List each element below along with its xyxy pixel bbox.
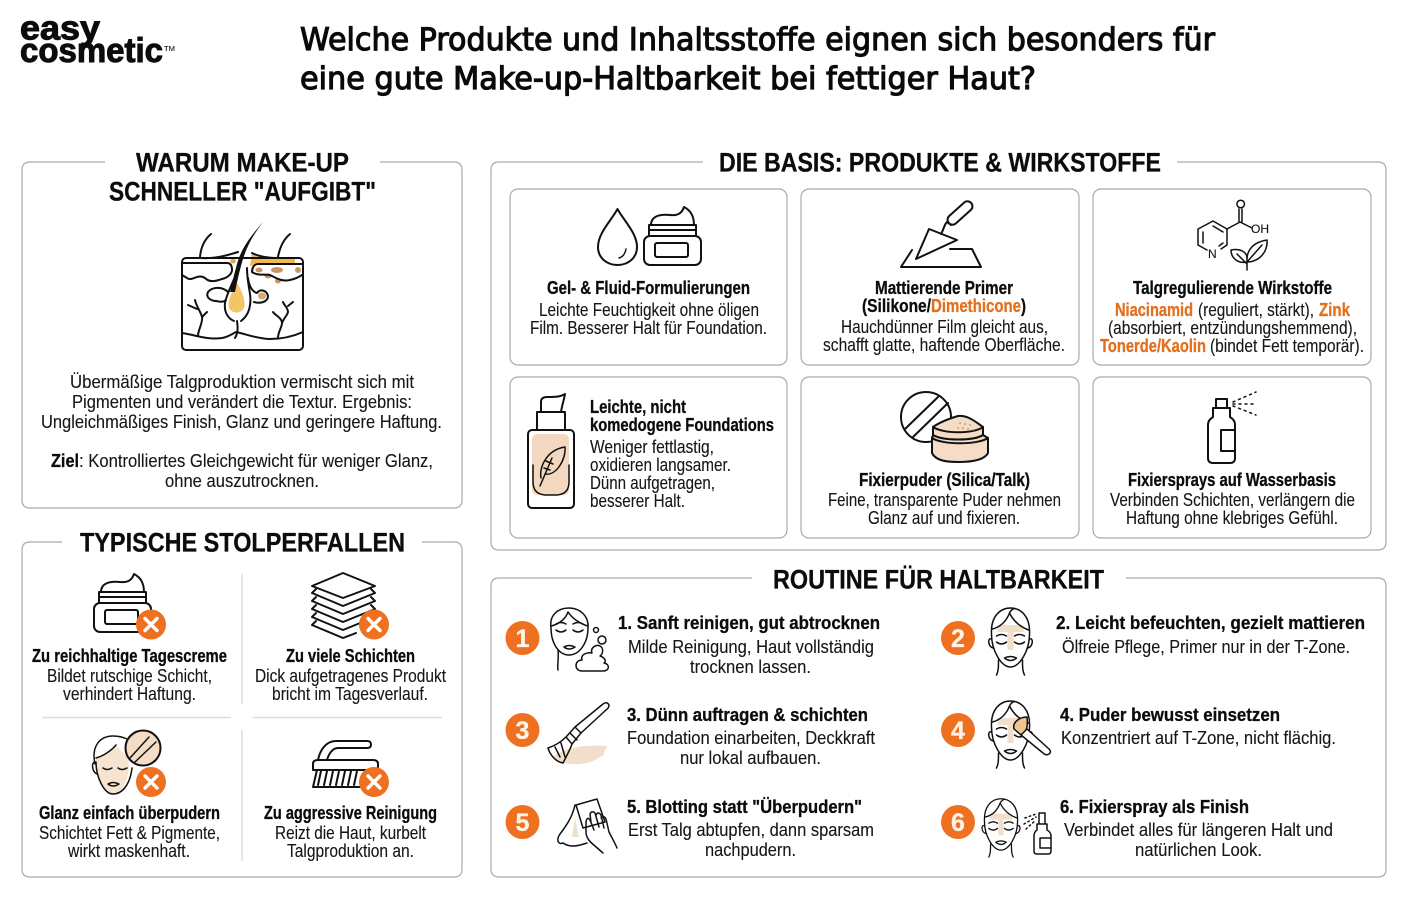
- panel: warum make-up schneller aufgibt: [22, 148, 462, 508]
- card: gel and fluid formulations: Leichte Feuchtigkeit ohne öligen: [539, 300, 759, 320]
- step 6: natürlichen Look.: [1135, 840, 1262, 860]
- badge: 5: [506, 805, 540, 839]
- card: mattifying primer: Mattierende Primer: [875, 278, 1013, 298]
- card: setting powder: Fixierpuder (Silica/Talk): [859, 470, 1030, 490]
- pitfall: powdering over shine: wirkt maskenhaft.: [67, 841, 190, 861]
- icon: blotting paper on nose: [558, 799, 617, 853]
- heading: warum make-up: [109, 148, 376, 206]
- icon: puff and powder jar: [901, 392, 988, 462]
- text block: goal: ohne auszutrocknen.: [165, 471, 319, 491]
- icon: layer stack with cross: [312, 573, 389, 640]
- text block: explanation: Übermäßige Talgproduktion vermischt sich mit: [70, 372, 414, 392]
- step 3: 3. Dünn auftragen & schichten: [627, 705, 868, 725]
- step 1: trocknen lassen.: [690, 657, 811, 677]
- step 5: Erst Talg abtupfen, dann sparsam: [628, 820, 874, 840]
- icon: spray bottle: [1208, 392, 1257, 463]
- step 6: 6. Fixierspray als Finish: [1060, 797, 1249, 817]
- pitfall: too many layers: bricht im Tagesverlauf.: [272, 684, 428, 704]
- heading: routine: ROUTINE FÜR HALTBARKEIT: [773, 564, 1104, 594]
- card: setting sprays: Fixiersprays auf Wasserbasis: [1128, 470, 1336, 490]
- step 2: 2. Leicht befeuchten, gezielt mattieren: [1056, 613, 1365, 633]
- logo: [20, 10, 175, 70]
- icon: face with powder brush: [989, 701, 1050, 768]
- step 4: 4. Puder bewusst einsetzen: [1060, 705, 1280, 725]
- card: sebum regulating actives: Tonerde/Kaolin: [1100, 336, 1206, 356]
- panel: routine: [491, 564, 1386, 877]
- title: [300, 22, 1215, 97]
- icon: niacinamide molecule and leaves: [1198, 200, 1269, 270]
- card: light non-comedogenic foundations: oxidieren langsamer.: [590, 455, 731, 475]
- badge: 3: 3: [516, 717, 529, 745]
- pitfall: rich day cream: Bildet rutschige Schicht,: [47, 666, 212, 686]
- step 4: [941, 701, 1336, 768]
- logo: TM: [164, 46, 175, 53]
- pitfall: rich day cream: [32, 574, 227, 704]
- card: setting sprays: [1093, 377, 1371, 538]
- text block: explanation: Ungleichmäßiges Finish, Glanz und geringere Haftung.: [41, 412, 442, 432]
- badge: 1: [506, 621, 540, 655]
- card: sebum regulating actives: Talgregulierende Wirkstoffe: [1133, 278, 1332, 298]
- title: Welche Produkte und Inhaltsstoffe eignen sich besonders für: [300, 22, 1215, 58]
- icon: niacinamide molecule and leaves: OH: [1251, 222, 1269, 236]
- step 6: [941, 797, 1333, 860]
- card: sebum regulating actives: (reguliert, stärkt),: [1198, 300, 1314, 320]
- pitfall: aggressive cleansing: Reizt die Haut, kurbelt: [275, 823, 426, 843]
- step 3: Foundation einarbeiten, Deckkraft: [627, 728, 875, 748]
- icon: scrub brush with cross: [313, 741, 389, 797]
- card: sebum regulating actives: (absorbiert, entzündungshemmend),: [1108, 318, 1357, 338]
- panel: die basis: [491, 148, 1386, 550]
- icon: drop and cream jar: [598, 207, 701, 265]
- step 5: [506, 797, 874, 860]
- icon: foundation bottle with feather: [528, 394, 574, 508]
- card: mattifying primer: (Silikone/: [862, 296, 931, 316]
- icon: face with powder puff and cross: [93, 730, 166, 797]
- card: light non-comedogenic foundations: Weniger fettlastig,: [590, 437, 714, 457]
- step 4: Konzentriert auf T-Zone, nicht flächig.: [1061, 728, 1336, 748]
- pitfall: aggressive cleansing: [264, 741, 437, 861]
- pitfall: aggressive cleansing: Talgproduktion an.: [287, 841, 414, 861]
- heading: die basis: DIE BASIS: PRODUKTE & WIRKSTOFFE: [719, 148, 1161, 178]
- card: setting sprays: Haftung ohne klebriges Gefühl.: [1126, 508, 1338, 528]
- icon: trowel on primer film: [901, 199, 981, 267]
- step 5: nachpudern.: [705, 840, 796, 860]
- pitfall: aggressive cleansing: Zu aggressive Reinigung: [264, 803, 437, 823]
- icon: niacinamide molecule and leaves: N: [1208, 247, 1217, 261]
- card: light non-comedogenic foundations: Leichte, nicht: [590, 397, 686, 417]
- card: mattifying primer: schafft glatte, haftende Oberfläche.: [823, 335, 1065, 355]
- card: setting powder: Feine, transparente Puder nehmen: [828, 490, 1061, 510]
- icon: face with foam: [551, 608, 608, 671]
- badge: 4: [941, 713, 975, 747]
- card: sebum regulating actives: Zink: [1319, 300, 1351, 320]
- badge: 2: 2: [951, 625, 965, 653]
- icon: brush with foundation swatch: [548, 703, 609, 764]
- step 5: 5. Blotting statt "Überpudern": [627, 797, 862, 817]
- badge: 4: 4: [951, 717, 965, 745]
- panel: typische stolperfallen: [22, 528, 462, 877]
- icon: cream jar with cross: [94, 574, 166, 640]
- step 2: Ölfreie Pflege, Primer nur in der T-Zone.: [1062, 637, 1350, 657]
- card: mattifying primer: Dimethicone: [931, 296, 1021, 316]
- card: gel and fluid formulations: [510, 189, 787, 365]
- pitfall: powdering over shine: [39, 730, 220, 861]
- heading: typische stolperfallen: TYPISCHE STOLPERFALLEN: [80, 528, 405, 558]
- text block: goal: Ziel: [51, 451, 79, 471]
- card: mattifying primer: ): [1021, 296, 1026, 316]
- step 1: 1. Sanft reinigen, gut abtrocknen: [618, 613, 880, 633]
- heading: warum make-up: SCHNELLER "AUFGIBT": [109, 176, 376, 206]
- logo: cosmetic: [20, 32, 163, 70]
- pitfall: powdering over shine: Glanz einfach überpudern: [39, 803, 220, 823]
- step 3: [506, 703, 875, 768]
- card: setting sprays: Verbinden Schichten, verlängern die: [1110, 490, 1355, 510]
- badge: 1: 1: [516, 625, 530, 653]
- card: light non-comedogenic foundations: [510, 377, 787, 538]
- pitfall: too many layers: Zu viele Schichten: [286, 646, 415, 666]
- text block: explanation: [41, 372, 442, 432]
- badge: 3: [506, 713, 540, 747]
- card: sebum regulating actives: (bindet Fett temporär).: [1210, 336, 1364, 356]
- card: light non-comedogenic foundations: komedogene Foundations: [590, 415, 774, 435]
- card: sebum regulating actives: [1093, 189, 1371, 365]
- title: eine gute Make-up-Haltbarkeit bei fettiger Haut?: [300, 61, 1036, 97]
- icon: skin cross-section with hair follicle: [182, 222, 303, 350]
- card: mattifying primer: [801, 189, 1079, 365]
- step 6: Verbindet alles für längeren Halt und: [1064, 820, 1333, 840]
- pitfall: too many layers: [255, 573, 446, 704]
- step 3: nur lokal aufbauen.: [680, 748, 821, 768]
- pitfall: powdering over shine: Schichtet Fett & Pigmente,: [39, 823, 220, 843]
- step 1: Milde Reinigung, Haut vollständig: [628, 637, 874, 657]
- heading: warum make-up: WARUM MAKE-UP: [136, 148, 349, 178]
- icon: face with setting spray: [982, 799, 1051, 857]
- card: mattifying primer: Hauchdünner Film gleicht aus,: [841, 317, 1048, 337]
- icon: face with t-zone: [989, 608, 1032, 675]
- card: light non-comedogenic foundations: Dünn aufgetragen,: [590, 473, 715, 493]
- card: setting powder: Glanz auf und fixieren.: [868, 508, 1020, 528]
- pitfall: rich day cream: verhindert Haftung.: [63, 684, 196, 704]
- card: light non-comedogenic foundations: besserer Halt.: [590, 491, 685, 511]
- badge: 5: 5: [516, 809, 530, 837]
- pitfall: rich day cream: Zu reichhaltige Tagescreme: [32, 646, 227, 666]
- card: setting powder: [801, 377, 1079, 538]
- logo: easy: [20, 10, 100, 48]
- card: gel and fluid formulations: Gel- & Fluid-Formulierungen: [547, 278, 750, 298]
- step 2: [941, 608, 1365, 675]
- card: gel and fluid formulations: Film. Besserer Halt für Foundation.: [530, 318, 767, 338]
- text block: goal: [51, 451, 433, 491]
- step 1: [506, 608, 880, 677]
- badge: 6: [941, 805, 975, 839]
- text block: goal: : Kontrolliertes Gleichgewicht für weniger Glanz,: [79, 451, 433, 471]
- card: sebum regulating actives: Niacinamid: [1115, 300, 1193, 320]
- badge: 6: 6: [951, 809, 965, 837]
- pitfall: too many layers: Dick aufgetragenes Produkt: [255, 666, 446, 686]
- text block: explanation: Pigmenten und verändert die Textur. Ergebnis:: [72, 392, 412, 412]
- badge: 2: [941, 621, 975, 655]
